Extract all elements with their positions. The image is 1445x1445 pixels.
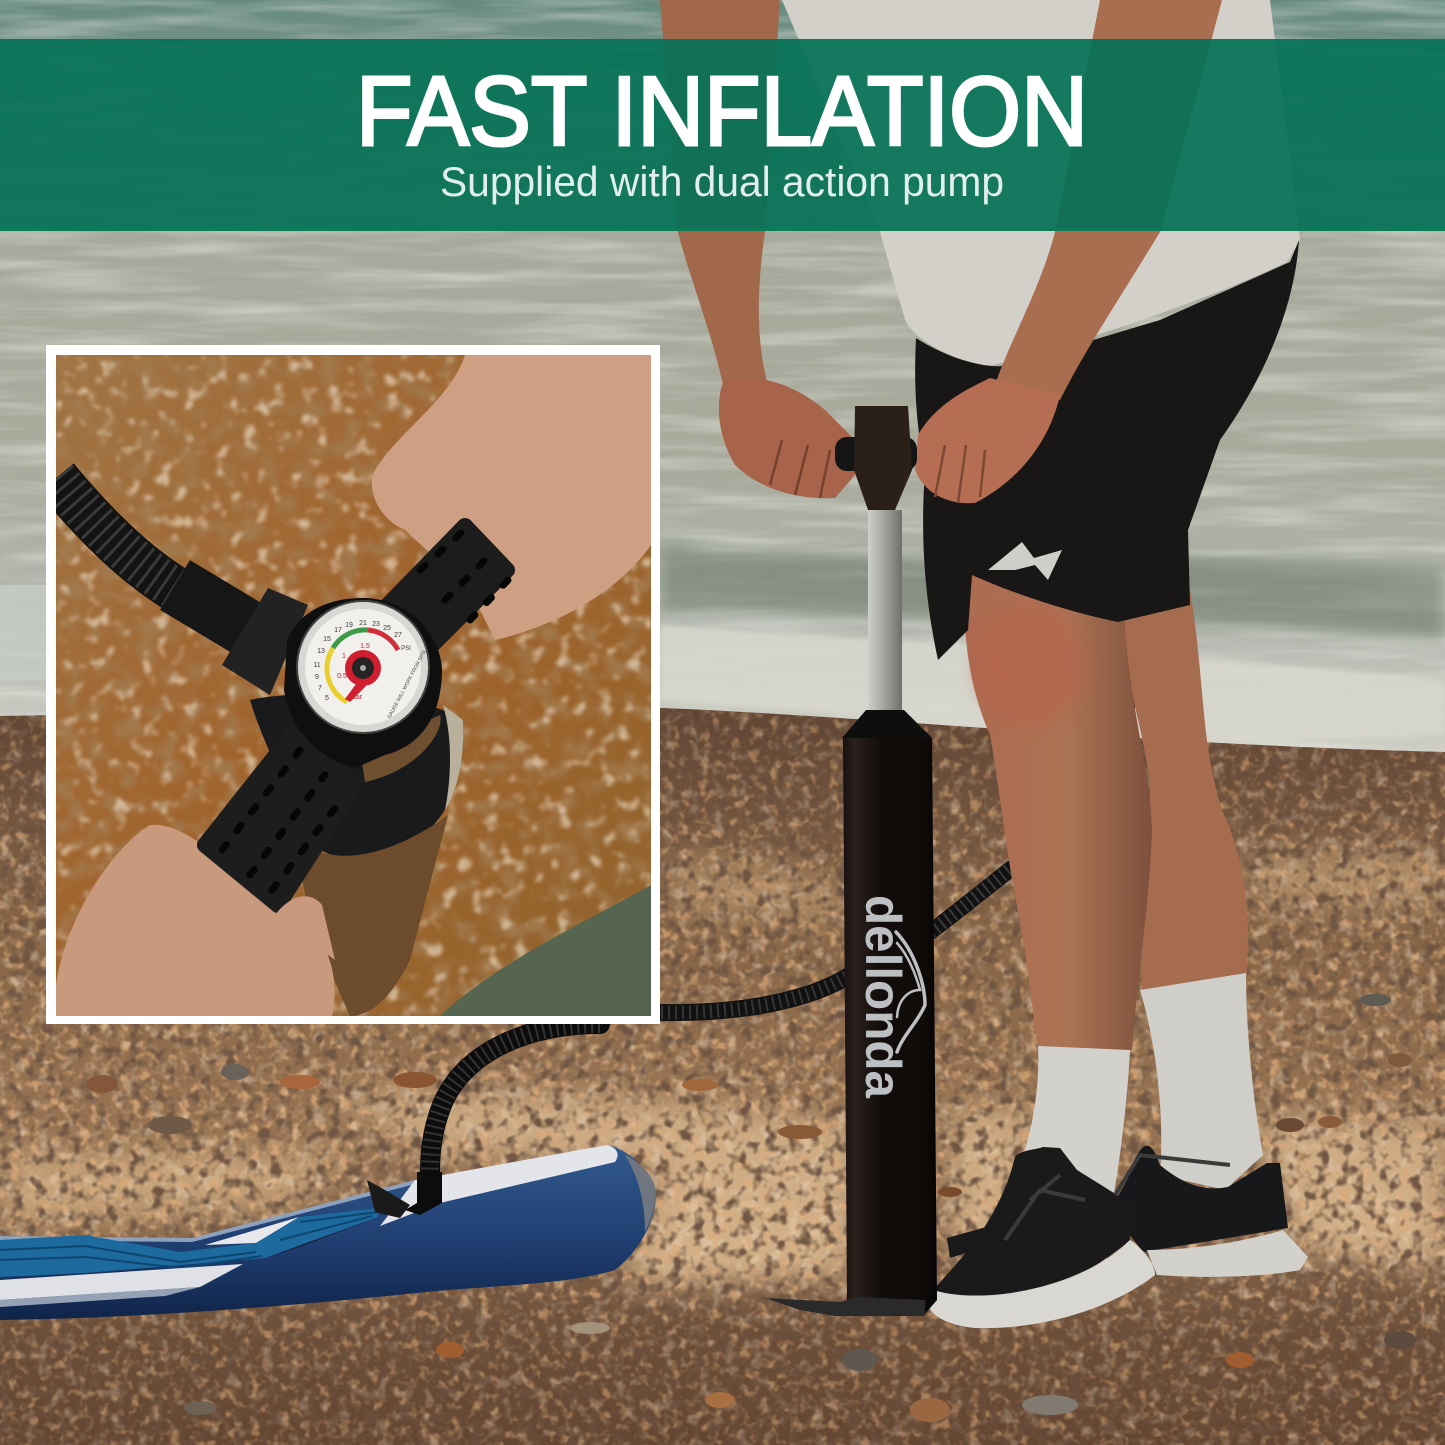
- left hand fingers: [770, 440, 830, 498]
- pump barrel reflection: [300, 815, 448, 1016]
- banner: [0, 39, 1445, 231]
- hose behind the legs: [430, 650, 1130, 1195]
- strap ribs: [0, 1212, 378, 1268]
- logo swoosh: [896, 932, 925, 1052]
- background: sea: [0, 0, 1445, 760]
- pump cone: [250, 694, 463, 859]
- pump collar: [842, 710, 932, 738]
- person: [660, 0, 1308, 1328]
- foreground stones: [86, 994, 1416, 1422]
- shoe laces: [1005, 1155, 1230, 1240]
- gauge face: 5: [325, 695, 329, 702]
- hose: [56, 478, 180, 592]
- inset photo: pressure gauge close up: [46, 345, 660, 1024]
- shoe front sole: [925, 1240, 1155, 1328]
- gauge face: 21: [359, 620, 367, 627]
- shorts logo: [988, 542, 1062, 580]
- right arm: [995, 0, 1222, 400]
- needle hub: [345, 684, 366, 702]
- left arm: [660, 0, 780, 395]
- far rail: [0, 1182, 415, 1240]
- title: FAST INFLATION: [356, 56, 1088, 166]
- pump barrel: [843, 738, 937, 1314]
- gauge face: [305, 609, 428, 725]
- gauge face: 0.5: [337, 673, 347, 680]
- shoe back sole: [1147, 1230, 1308, 1277]
- right hand fingers: [935, 445, 985, 503]
- connector nut: [222, 588, 308, 695]
- board nose shade: [625, 1155, 656, 1232]
- lower deck: [0, 1264, 243, 1300]
- dual action pump: [765, 406, 937, 1316]
- pump handle: [835, 437, 917, 471]
- handle lower: [205, 735, 355, 905]
- thumb over lower handle: [275, 896, 335, 960]
- gauge face: bar: [352, 694, 363, 701]
- shorts: [915, 240, 1299, 660]
- white panel: [205, 1217, 299, 1245]
- gauge housing: [284, 598, 442, 768]
- gauge face: PSI: [401, 646, 411, 652]
- gauge face: 23: [372, 621, 380, 628]
- pump rod: [868, 510, 902, 712]
- hand top: [372, 355, 651, 640]
- sock back: [1140, 973, 1263, 1190]
- gauge face: 25: [383, 625, 391, 632]
- gauge face: 9: [315, 674, 319, 681]
- deck recess: [265, 1217, 378, 1258]
- gauge glass: [297, 601, 429, 733]
- cone reflection: [443, 705, 463, 810]
- gauge face: 17: [334, 627, 342, 634]
- gauge face: GAUGE WILL WORK FROM 5PSI: [387, 650, 428, 720]
- handle head: [854, 406, 912, 510]
- subtitle: Supplied with dual action pump: [440, 158, 1004, 205]
- handle upper: [383, 525, 510, 652]
- lower hand: [56, 825, 335, 1016]
- left hand: [719, 378, 855, 498]
- brand logo: dellonda: [855, 895, 911, 1099]
- gauge face: 15: [323, 636, 331, 643]
- background: pebble beach: [0, 700, 1445, 1445]
- gauge face: 1.5: [360, 643, 370, 650]
- gauge face: 13: [317, 648, 325, 655]
- sand patches: [0, 850, 1445, 1290]
- shoe back: [1110, 1146, 1288, 1252]
- valve: [367, 1180, 410, 1218]
- green fabric: [440, 885, 651, 1016]
- blue strap: [0, 1208, 378, 1277]
- gauge face: 1: [342, 653, 346, 660]
- gauge face: 19: [345, 622, 353, 629]
- lower deck stripe: [0, 1287, 200, 1307]
- shirt: [782, 0, 1300, 366]
- gauge face: 27: [394, 632, 402, 639]
- front leg: [965, 570, 1152, 1050]
- upper deck: [380, 1145, 618, 1226]
- hose base: [405, 1172, 442, 1215]
- back leg: [1120, 590, 1248, 990]
- right hand: [915, 378, 1060, 503]
- gauge face: 7: [318, 685, 322, 692]
- shoe front toe behind: [947, 1225, 993, 1258]
- sock front: [1020, 1046, 1130, 1205]
- shoe front: [933, 1147, 1130, 1303]
- pump foot: [765, 1297, 925, 1316]
- paddle board: [0, 1145, 656, 1320]
- knee highlight: [975, 605, 1085, 725]
- gauge face: 11: [313, 662, 321, 669]
- board hull: [0, 1145, 656, 1320]
